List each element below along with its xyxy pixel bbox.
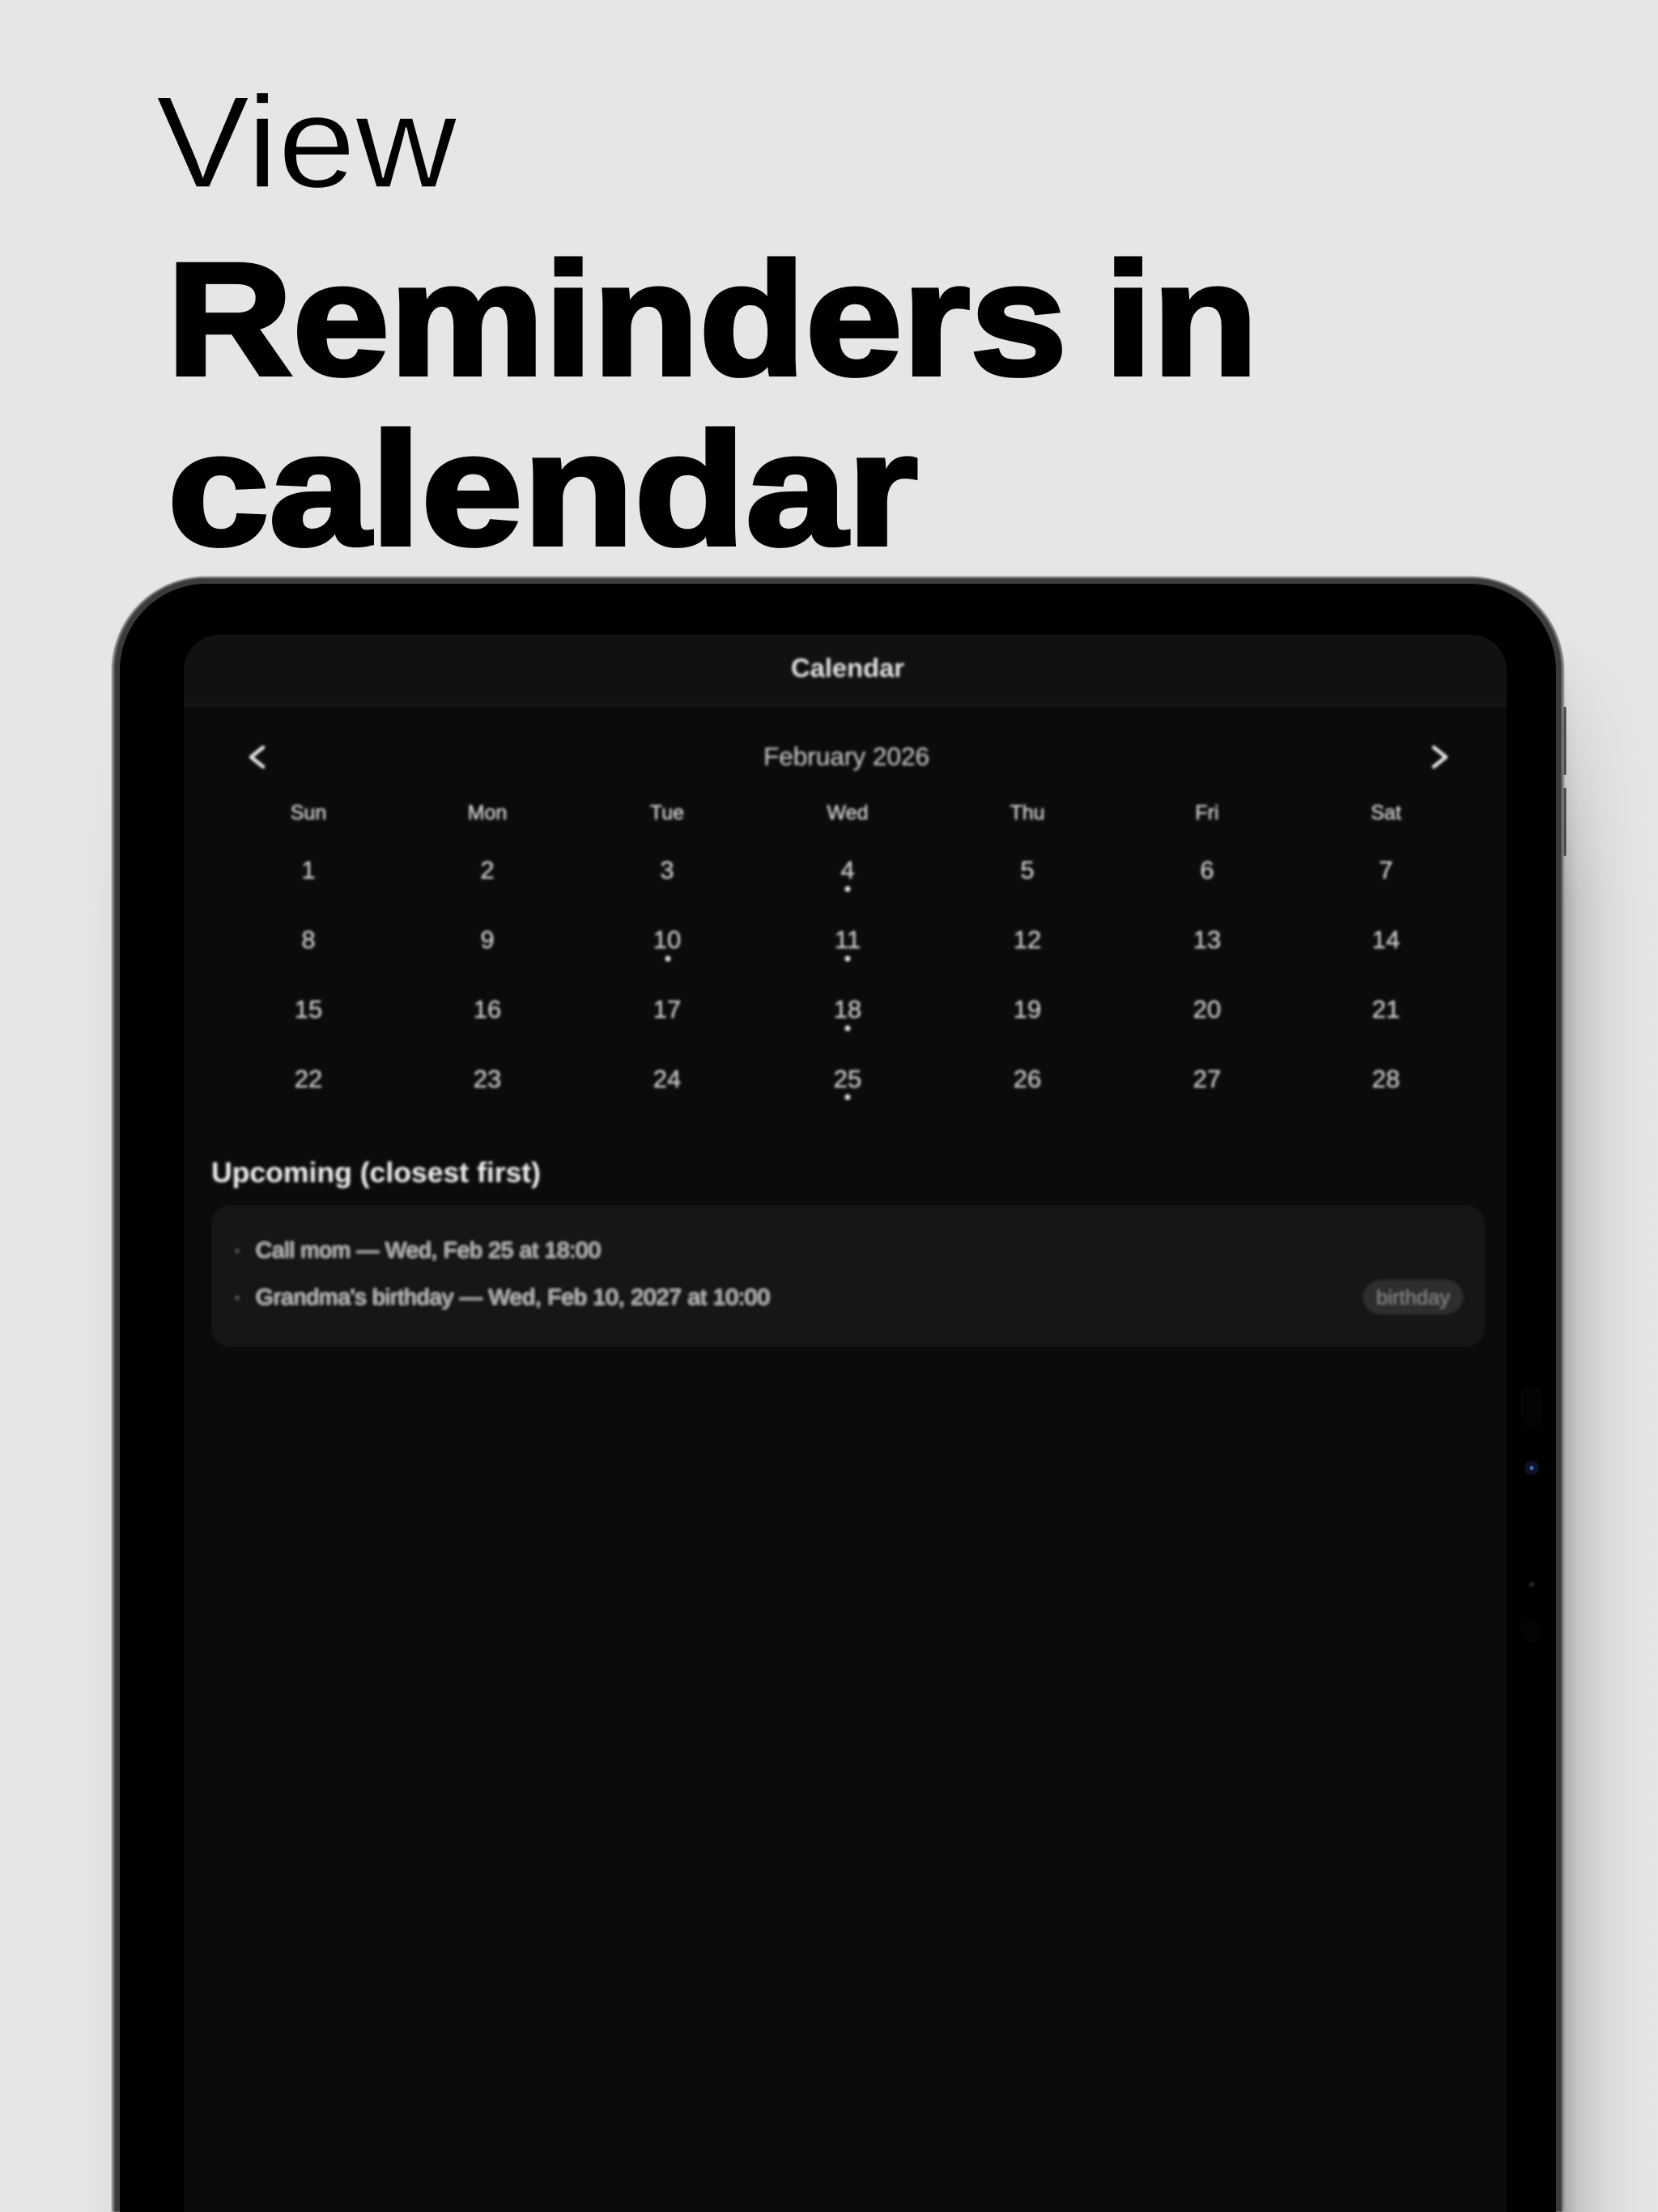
icon: next chevron — [1434, 747, 1446, 767]
icon: previous chevron — [251, 747, 263, 767]
upcoming heading: Upcoming (closest first) — [211, 1157, 541, 1189]
weekday header: Tue — [650, 802, 684, 824]
calendar days week 3: 18 — [834, 995, 861, 1023]
calendar days week 3: 19 — [1014, 995, 1041, 1023]
month label: February 2026 — [763, 742, 929, 771]
calendar days week 4: 23 — [474, 1065, 501, 1093]
calendar days week 2: 11 — [835, 925, 861, 954]
weekday header: Wed — [827, 802, 868, 824]
calendar days week 1: 7 — [1379, 856, 1393, 884]
title line: Reminders in: in — [1104, 230, 1258, 408]
calendar days week 4: 22 — [295, 1065, 322, 1093]
calendar days week 2 — [301, 925, 1400, 954]
device shadow — [81, 567, 1658, 2212]
camera sensors — [1520, 1385, 1543, 1642]
calendar days week 3: 16 — [474, 995, 501, 1023]
calendar days week 2: 14 — [1372, 925, 1400, 954]
app header bar — [184, 635, 1507, 704]
calendar days week 4: 27 — [1193, 1065, 1221, 1093]
reminder item: grandma's birthday: Grandma's birthday — Wed, Feb 10, 2027 at 10:00 — [256, 1285, 770, 1309]
tablet device frame — [112, 576, 1564, 2212]
calendar days week 4: 24 — [653, 1065, 681, 1093]
weekday header: Mon — [468, 802, 507, 824]
calendar days week 4 — [295, 1065, 1400, 1093]
calendar days week 2: 13 — [1193, 925, 1221, 954]
birthday tag — [1363, 1280, 1463, 1314]
calendar days week 3: 21 — [1372, 995, 1400, 1023]
weekday header: Thu — [1010, 802, 1045, 824]
calendar days week 3: 17 — [653, 995, 681, 1023]
screen content — [211, 653, 1485, 1346]
calendar days week 4: 25 — [834, 1065, 861, 1093]
calendar days week 3 — [295, 995, 1400, 1023]
app screen — [184, 635, 1507, 2212]
calendar days week 1: 2 — [480, 856, 495, 884]
weekday header — [291, 802, 1401, 824]
birthday tag: birthday — [1376, 1287, 1450, 1309]
panel: upcoming reminders — [211, 1206, 1485, 1346]
weekday header: Fri — [1195, 802, 1219, 824]
calendar days week 2: 12 — [1014, 925, 1041, 954]
title line: calendar: calendar — [168, 400, 918, 578]
calendar days week 4: 28 — [1372, 1065, 1400, 1093]
calendar days week 1: 1 — [301, 856, 316, 884]
title line: Reminders in: Reminders — [167, 230, 1067, 408]
reminder item: call mom: Call mom — Wed, Feb 25 at 18:00 — [256, 1238, 601, 1262]
calendar days week 1: 5 — [1020, 856, 1035, 884]
calendar days week 3: 15 — [295, 995, 322, 1023]
title — [156, 70, 1258, 578]
reminder dots — [665, 886, 851, 1100]
weekday header: Sat — [1371, 802, 1401, 824]
calendar days week 2: 10 — [653, 925, 681, 954]
calendar days week 1: 6 — [1200, 856, 1214, 884]
month navigation — [251, 742, 1446, 771]
calendar days week 4: 26 — [1014, 1065, 1041, 1093]
title line: View: View — [156, 70, 457, 215]
calendar days week 2: 8 — [301, 925, 316, 954]
device side buttons — [1563, 707, 1566, 856]
calendar days week 1: 4 — [840, 856, 855, 884]
calendar days week 1 — [301, 856, 1393, 884]
calendar days week 2: 9 — [480, 925, 495, 954]
calendar days week 3: 20 — [1193, 995, 1221, 1023]
calendar days week 1: 3 — [660, 856, 674, 884]
header title: Calendar — [791, 653, 904, 683]
weekday header: Sun — [291, 802, 326, 824]
